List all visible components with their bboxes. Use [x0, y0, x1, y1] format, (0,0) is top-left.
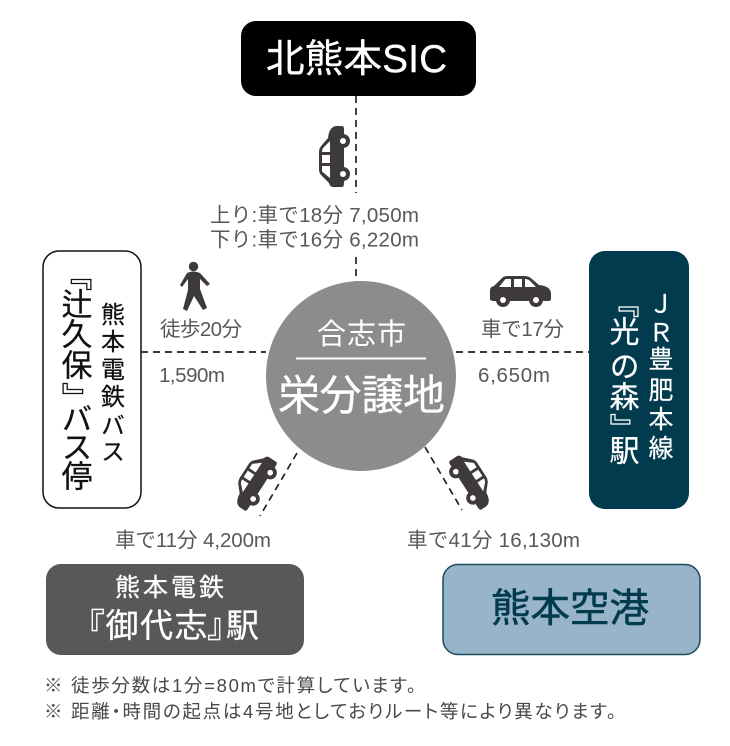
text: car time to 光の森: 車で17分	[481, 318, 564, 341]
panel: central circle 栄分譲地: 栄分譲地	[278, 372, 445, 419]
panel: 『光の森』駅	[589, 251, 689, 509]
label: 『光の森』駅: 『光の森』駅	[604, 288, 640, 465]
text: route to 熊本空港: 車で41分 16,130m	[407, 529, 580, 552]
icon: car heading to 御代志	[226, 450, 283, 515]
text: route to 御代志: 車で11分 4,200m	[115, 529, 271, 552]
text block: footnotes: ※ 距離・時間の起点は4号地としておりルート等により異なります。	[44, 701, 616, 722]
text block: top route distances: 上り:車で18分 7,050m	[210, 204, 419, 227]
label: JR豊肥本線: ＪＲ豊肥本線	[645, 291, 674, 460]
label: 熊本電鉄バス: 熊本電鉄バス	[96, 302, 124, 463]
panel: 北熊本SIC: 北熊本SIC	[266, 38, 447, 81]
panel: 『辻久保』バス停	[43, 251, 141, 508]
icon: car heading to 光の森	[490, 276, 551, 307]
dashed route: left	[141, 351, 266, 353]
panel: 熊本空港: 熊本空港	[491, 587, 649, 631]
dashed route: lower right	[425, 447, 462, 510]
panel: 熊本空港	[443, 564, 700, 654]
dashed route: lower left	[260, 453, 297, 516]
label: 『辻久保』バス停: 『辻久保』バス停	[56, 260, 92, 491]
text block: top route distances	[210, 204, 419, 252]
text block: footnotes	[44, 675, 616, 722]
text: walking distance: 1,590m	[159, 364, 225, 387]
icon: car heading to 熊本空港	[443, 449, 500, 514]
dashed route: right	[456, 351, 589, 353]
panel: 『御代志』駅	[46, 564, 304, 655]
panel: central circle 栄分譲地	[266, 281, 456, 471]
dashed route: top	[355, 96, 357, 283]
text: walking time: 徒歩20分	[160, 318, 242, 341]
text: distance to 光の森: 6,650m	[478, 364, 550, 387]
panel: 『御代志』駅: 熊本電鉄	[115, 574, 224, 602]
text block: top route distances: 下り:車で16分 6,220m	[210, 228, 419, 252]
icon: walking person	[180, 262, 210, 311]
panel: 北熊本SIC	[241, 21, 476, 96]
panel: 『御代志』駅: 『御代志』駅	[72, 607, 259, 644]
panel: central circle 栄分譲地: 合志市	[317, 318, 406, 351]
icon: car heading to 北熊本SIC	[319, 126, 350, 187]
text block: footnotes: ※ 徒歩分数は1分=80mで計算しています。	[44, 675, 416, 696]
